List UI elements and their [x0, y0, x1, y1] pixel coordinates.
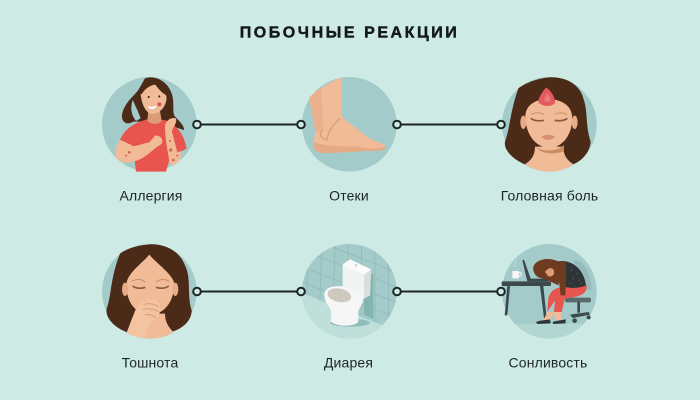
head and hair: [533, 259, 560, 285]
connector: bottom row: [193, 288, 505, 295]
connector: top row: [193, 121, 505, 128]
icon: headache woman: [502, 77, 597, 172]
label: nausea: Тошнота: [122, 354, 178, 370]
label: allergy: Аллергия: [120, 188, 182, 204]
icon: toilet: [302, 244, 396, 339]
label: edema: Отеки: [329, 188, 369, 204]
chair: [565, 298, 591, 323]
desk: [502, 260, 551, 318]
label: headache: Головная боль: [501, 188, 598, 204]
title: ПОБОЧНЫЕ РЕАКЦИИ: [240, 24, 459, 42]
icon: sleepy woman at desk: [502, 244, 597, 339]
icon: swollen foot: [302, 77, 397, 172]
label: drowsiness: Сонливость: [509, 354, 587, 370]
legs: [547, 285, 587, 312]
icon: nausea woman: [102, 244, 197, 339]
icon: allergy woman: [102, 77, 197, 172]
torso: [558, 261, 586, 288]
label: diarrhea: Диарея: [324, 354, 373, 370]
